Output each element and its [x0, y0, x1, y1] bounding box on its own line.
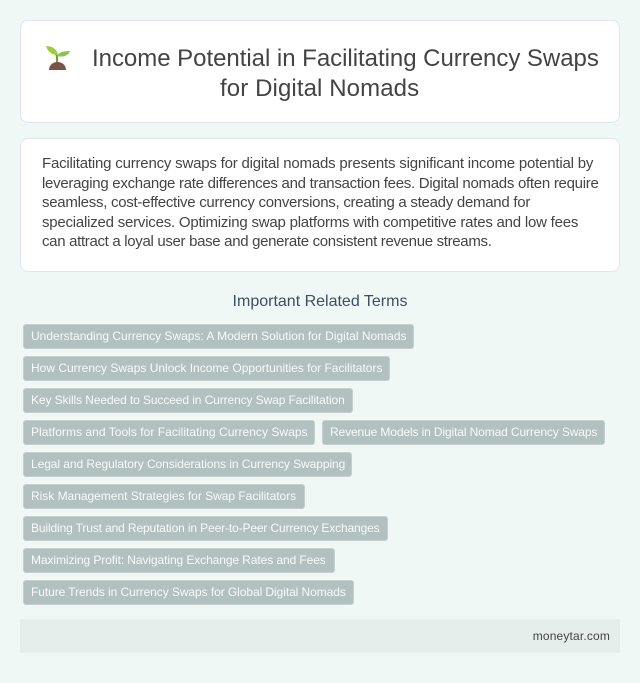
term: Building Trust and Reputation in Peer-to-Peer Currency Exchanges: [31, 521, 380, 535]
term: [322, 420, 605, 445]
term: [23, 420, 315, 445]
text block: summary: seamless, cost-effective currency conversions, creating a steady demand for: [42, 194, 530, 211]
term: [23, 324, 414, 349]
term: Maximizing Profit: Navigating Exchange Rates and Fees: [31, 553, 326, 567]
title: Income Potential in Facilitating Currency Swaps: [92, 45, 599, 72]
heading: important related terms: Important Related Terms: [233, 293, 407, 310]
term: Future Trends in Currency Swaps for Global Digital Nomads: [31, 585, 346, 599]
term: Risk Management Strategies for Swap Facilitators: [31, 489, 296, 503]
term: Platforms and Tools for Facilitating Currency Swaps: [31, 425, 308, 439]
footer bar: [20, 619, 620, 653]
term: Understanding Currency Swaps: A Modern Solution for Digital Nomads: [31, 329, 407, 343]
term: [23, 516, 388, 541]
term: [23, 548, 335, 573]
text block: summary: [42, 155, 599, 250]
term: Legal and Regulatory Considerations in Currency Swapping: [31, 457, 345, 471]
term: [23, 388, 353, 413]
term: Revenue Models in Digital Nomad Currency Swaps: [330, 425, 597, 439]
text block: summary: leveraging exchange rate differences and transaction fees. Digital nomads often require: [42, 174, 599, 192]
term: How Currency Swaps Unlock Income Opportunities for Facilitators: [31, 361, 382, 375]
panel: title header: [20, 20, 620, 123]
term: [23, 484, 305, 509]
text block: summary: Facilitating currency swaps for digital nomads presents significant income potential by: [42, 155, 593, 172]
text block: summary: can attract a loyal user base and generate consistent revenue streams.: [42, 233, 492, 250]
panel: summary paragraph: [20, 138, 620, 272]
term: [23, 356, 390, 381]
term: [23, 452, 352, 477]
footer source text: moneytar.com: [533, 629, 610, 643]
text block: summary: specialized services. Optimizing swap platforms with competitive rates and low fees: [42, 214, 578, 230]
title: for Digital Nomads: [220, 75, 419, 102]
term: [23, 580, 354, 605]
term: Key Skills Needed to Succeed in Currency Swap Facilitation: [31, 393, 345, 407]
icon: seedling: [46, 46, 70, 70]
related terms list: [23, 324, 605, 605]
title: [92, 45, 599, 102]
